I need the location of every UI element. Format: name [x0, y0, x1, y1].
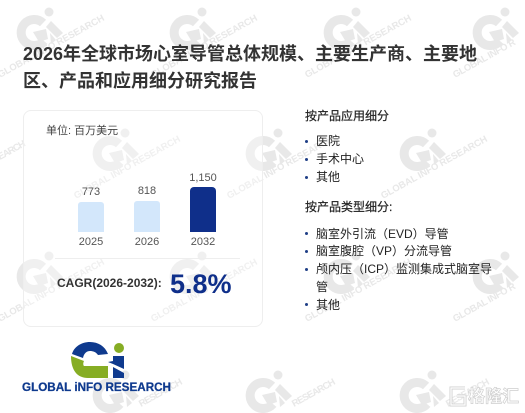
bar 2025	[78, 202, 104, 232]
text: GLOBAL INFO RESEARCH	[379, 134, 490, 202]
text: GLOBAL INFO RESEARCH	[149, 13, 260, 81]
list: product types: 其他	[316, 298, 340, 312]
list: product types: 脑室腹腔（VP）分流导管	[316, 244, 452, 258]
year 2026: 2026	[135, 236, 159, 248]
text: GLOBAL INFO RESEARCH	[303, 13, 414, 81]
title: 2026年全球市场心室导管总体规模、主要生产商、主要地区、产品和应用细分研究报告	[23, 44, 477, 91]
list: applications: 医院	[316, 134, 340, 148]
bar 2032	[190, 187, 216, 232]
CAGR value: 5.8%	[170, 269, 232, 299]
logo mark	[71, 342, 124, 378]
value 818: 818	[138, 185, 156, 197]
text: GLOBAL INFO R	[451, 37, 518, 81]
list: applications: 手术中心	[316, 152, 364, 166]
text: GLOBAL INFO RESEARCH	[225, 134, 336, 202]
heading: by application: 按产品应用细分	[305, 109, 389, 123]
list: applications: 其他	[316, 170, 340, 184]
value 1,150: 1,150	[189, 172, 217, 184]
text: GLOBAL INFO RESEARCH	[303, 257, 414, 325]
text: GLOBAL INFO RESEARCH	[149, 257, 260, 325]
logo	[22, 342, 171, 394]
list: product types: 管	[316, 280, 328, 294]
text: RESEARCH	[444, 377, 492, 410]
unit label: 单位: 百万美元	[46, 125, 118, 137]
year 2032: 2032	[191, 236, 215, 248]
heading: by product type: 按产品类型细分:	[305, 200, 392, 214]
bar chart	[78, 172, 217, 248]
panel: market size chart	[23, 110, 263, 327]
text: RESEARCH	[290, 377, 338, 410]
text: RESEARCH	[137, 377, 185, 410]
logo text: GLOBAL iNFO RESEARCH	[22, 382, 171, 394]
text: GLOBAL INFO RESEARCH	[72, 134, 183, 202]
list: product types	[305, 227, 492, 312]
source badge: 格隆汇	[468, 387, 519, 406]
list: applications	[305, 134, 364, 184]
value 773: 773	[82, 186, 100, 198]
year 2025: 2025	[79, 236, 103, 248]
bar 2026	[134, 201, 160, 232]
list: product types: 脑室外引流（EVD）导管	[316, 227, 449, 241]
text: GLOBAL INFO R	[451, 281, 518, 325]
source badge	[450, 386, 519, 406]
CAGR label: CAGR(2026-2032):	[57, 276, 162, 290]
list: product types: 颅内压（ICP）监测集成式脑室导	[316, 262, 492, 276]
